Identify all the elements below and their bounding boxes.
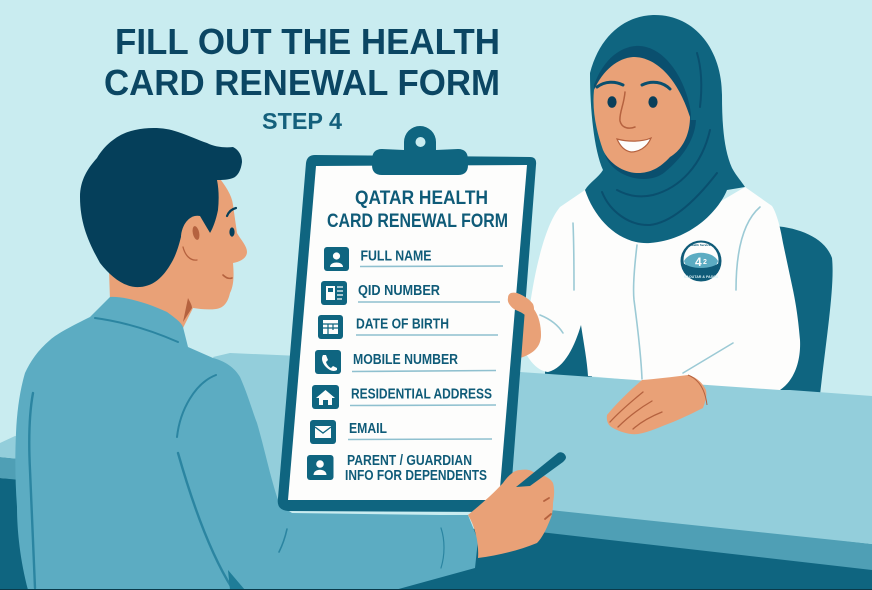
hijab inner band (594, 46, 691, 170)
nurse face (593, 57, 690, 173)
row: date of birth (318, 315, 498, 339)
clipboard frame (278, 155, 536, 512)
nurse left palm (520, 300, 541, 358)
coat seams (540, 207, 760, 379)
man neck and face (109, 175, 247, 328)
row: full name (324, 247, 503, 271)
nurse (524, 15, 800, 410)
desk dark front (0, 478, 30, 590)
nurse eyes (607, 96, 617, 108)
man head (80, 128, 247, 328)
row: email (310, 420, 492, 444)
row: full name: FULL NAME (360, 248, 432, 264)
nurse mouth (617, 138, 651, 152)
desk front edge (0, 457, 40, 482)
form heading (327, 187, 508, 232)
bottom edge line (0, 589, 872, 590)
nurse brows (597, 82, 670, 89)
chair behind nurse (760, 226, 833, 395)
row: qid number (321, 281, 500, 305)
row: parent or guardian info: INFO FOR DEPENDENTS (345, 468, 487, 484)
desk top (0, 436, 40, 461)
man hair (80, 128, 242, 287)
shirt fold wedge (228, 570, 245, 590)
row: email: EMAIL (349, 421, 387, 437)
hijab (585, 15, 745, 243)
clipboard (278, 126, 536, 512)
coat badge: KAOUTAR & PASOS (684, 275, 719, 279)
row: parent or guardian info (307, 453, 487, 484)
man eye (229, 227, 235, 237)
shirt creases (29, 318, 444, 588)
step label: STEP 4 (262, 108, 342, 134)
coat badge: 2 (703, 259, 707, 266)
row: residential address: RESIDENTIAL ADDRESS (351, 386, 492, 402)
coat badge: Health Services (690, 243, 712, 247)
man ear (181, 216, 210, 260)
row: qid number: QID NUMBER (358, 283, 440, 299)
finger lines (610, 392, 662, 429)
form heading: QATAR HEALTH (355, 187, 488, 209)
man mouth (223, 275, 232, 278)
coat badge: 4 (695, 255, 702, 269)
title: FILL OUT THE HEALTH (115, 21, 500, 62)
desk (0, 353, 872, 590)
nurse thumb (508, 293, 534, 317)
row: mobile number (315, 350, 496, 374)
title (104, 21, 500, 103)
man hand (468, 470, 554, 558)
clipboard clip (372, 126, 468, 175)
form heading: CARD RENEWAL FORM (327, 210, 508, 232)
clipboard paper (288, 165, 527, 500)
chin shadow (605, 120, 696, 179)
cuff edge (688, 375, 707, 405)
nurse coat (524, 187, 800, 410)
nurse nose (620, 92, 635, 128)
finger lines (544, 498, 551, 519)
hijab folds (602, 53, 717, 225)
row: residential address (312, 385, 496, 409)
row: date of birth: DATE OF BIRTH (356, 316, 449, 332)
nurse right hand (607, 375, 707, 434)
row: parent or guardian info: PARENT / GUARDIAN (347, 453, 472, 469)
title: CARD RENEWAL FORM (104, 62, 500, 103)
man shirt (15, 297, 478, 590)
pen (516, 452, 566, 487)
man brow (227, 208, 236, 216)
row: mobile number: MOBILE NUMBER (353, 352, 458, 368)
coat badge (680, 240, 722, 282)
neck shadow (183, 298, 192, 322)
